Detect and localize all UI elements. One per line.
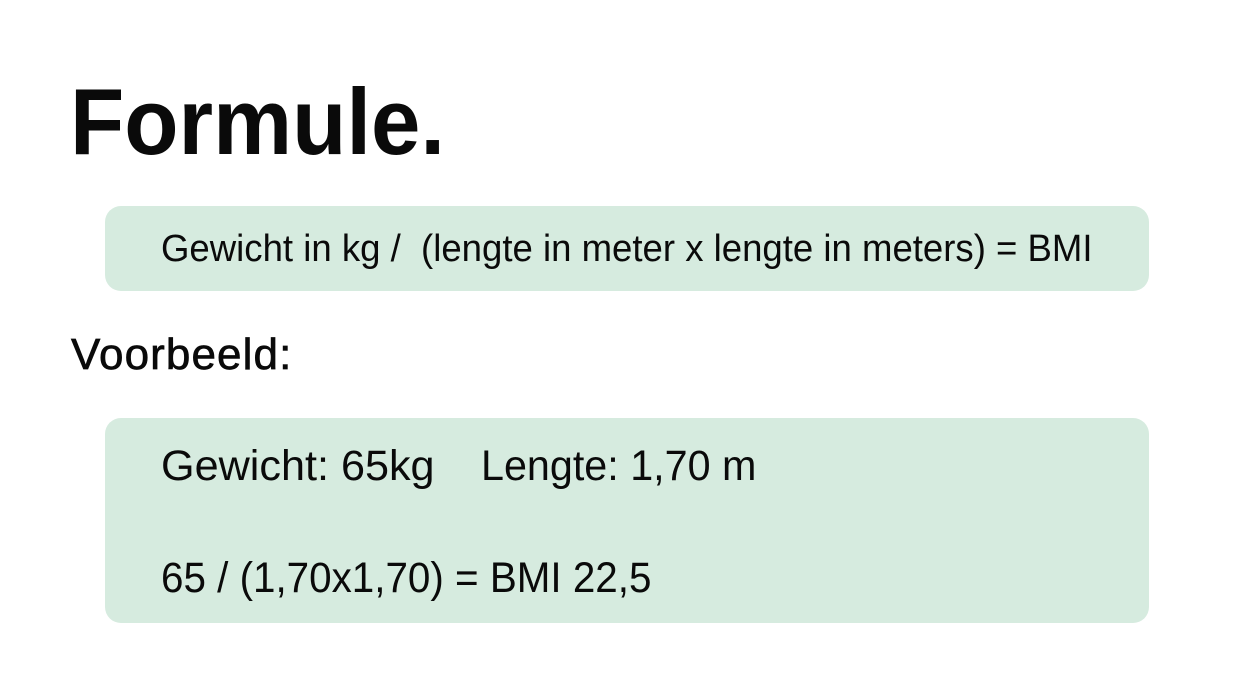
example calculation: 65 / (1,70x1,70) = BMI 22,5 [161, 554, 651, 602]
formula text: Gewicht in kg / (lengte in meter x lengte in meters) = BMI [161, 228, 1093, 270]
example values: Gewicht: 65kg [161, 442, 435, 490]
panel: example [105, 418, 1149, 623]
title: Formule. [70, 69, 445, 174]
example values [161, 442, 756, 490]
example values: Lengte: 1,70 m [481, 442, 756, 490]
heading: example: Voorbeeld: [71, 330, 292, 378]
panel: formula [105, 206, 1149, 291]
